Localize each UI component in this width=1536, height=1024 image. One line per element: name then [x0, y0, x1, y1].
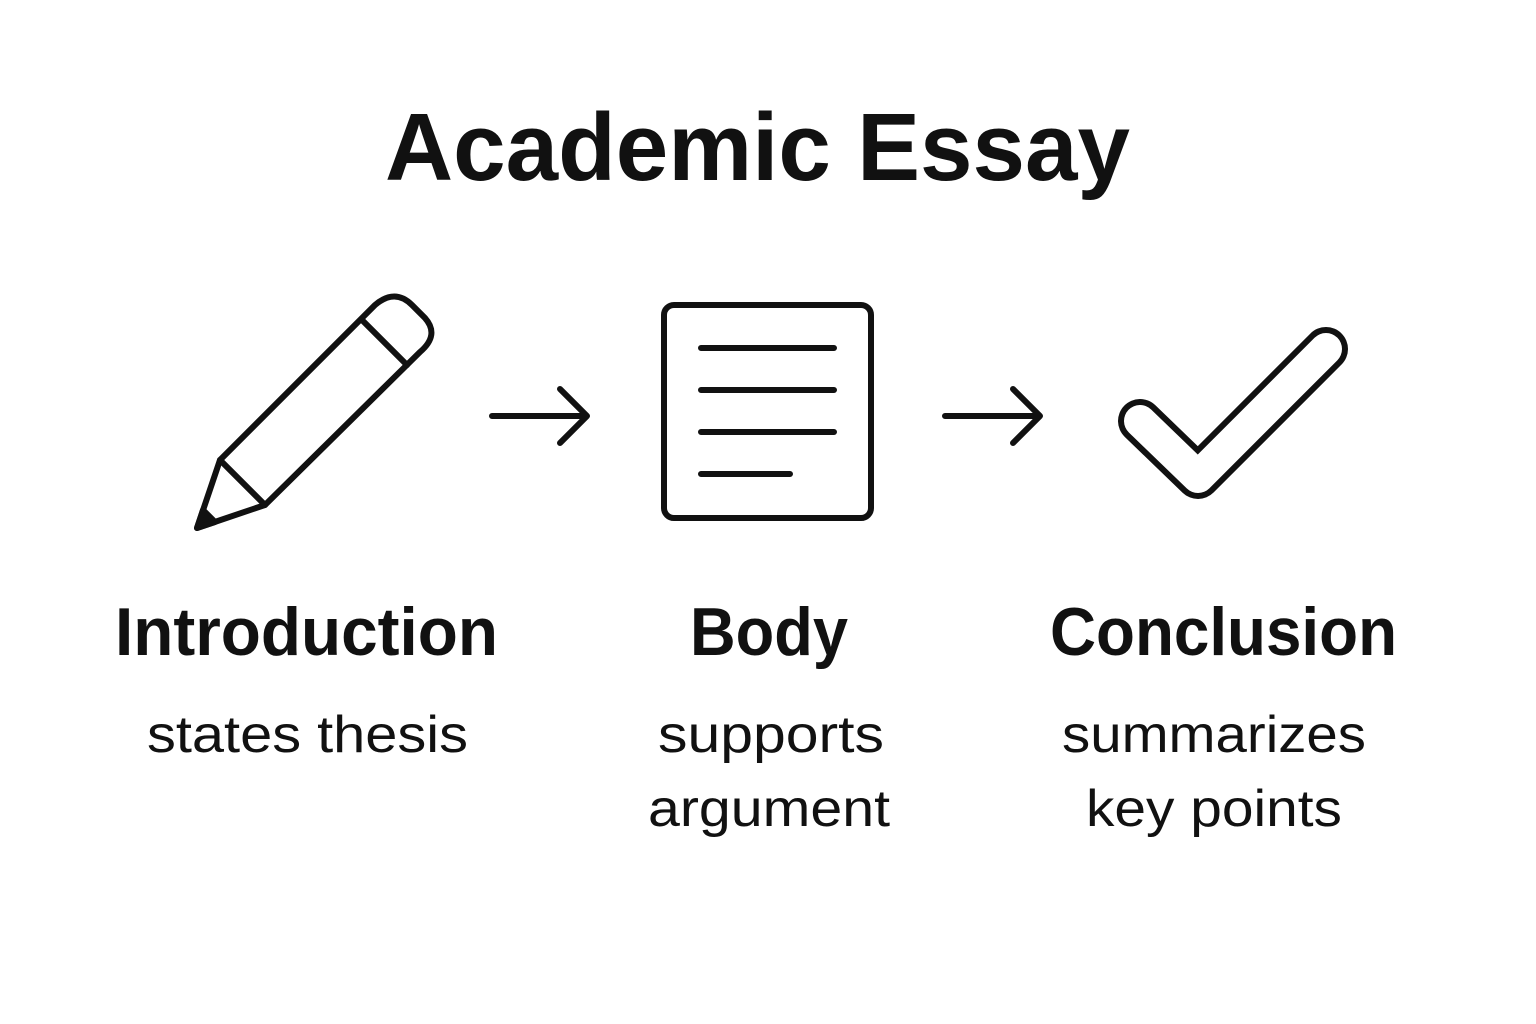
- text: supports argument: supports: [658, 706, 884, 764]
- icon: document: [664, 305, 871, 518]
- text: supports argument: [648, 706, 891, 838]
- text: summarizes key points: summarizes: [1062, 706, 1366, 764]
- title: Academic Essay: [385, 94, 1130, 201]
- heading: body: Body: [690, 594, 848, 670]
- text: states thesis: states thesis: [147, 706, 468, 764]
- text: summarizes key points: [1062, 706, 1366, 838]
- icon: pencil: [197, 296, 431, 528]
- heading: conclusion: Conclusion: [1050, 594, 1397, 670]
- text: summarizes key points: key points: [1086, 780, 1342, 838]
- icon: checkmark: [1140, 349, 1326, 477]
- arrow: intro to body: [492, 389, 587, 443]
- arrow: body to conclusion: [945, 389, 1040, 443]
- heading: introduction: Introduction: [115, 594, 498, 670]
- text: supports argument: argument: [648, 780, 891, 838]
